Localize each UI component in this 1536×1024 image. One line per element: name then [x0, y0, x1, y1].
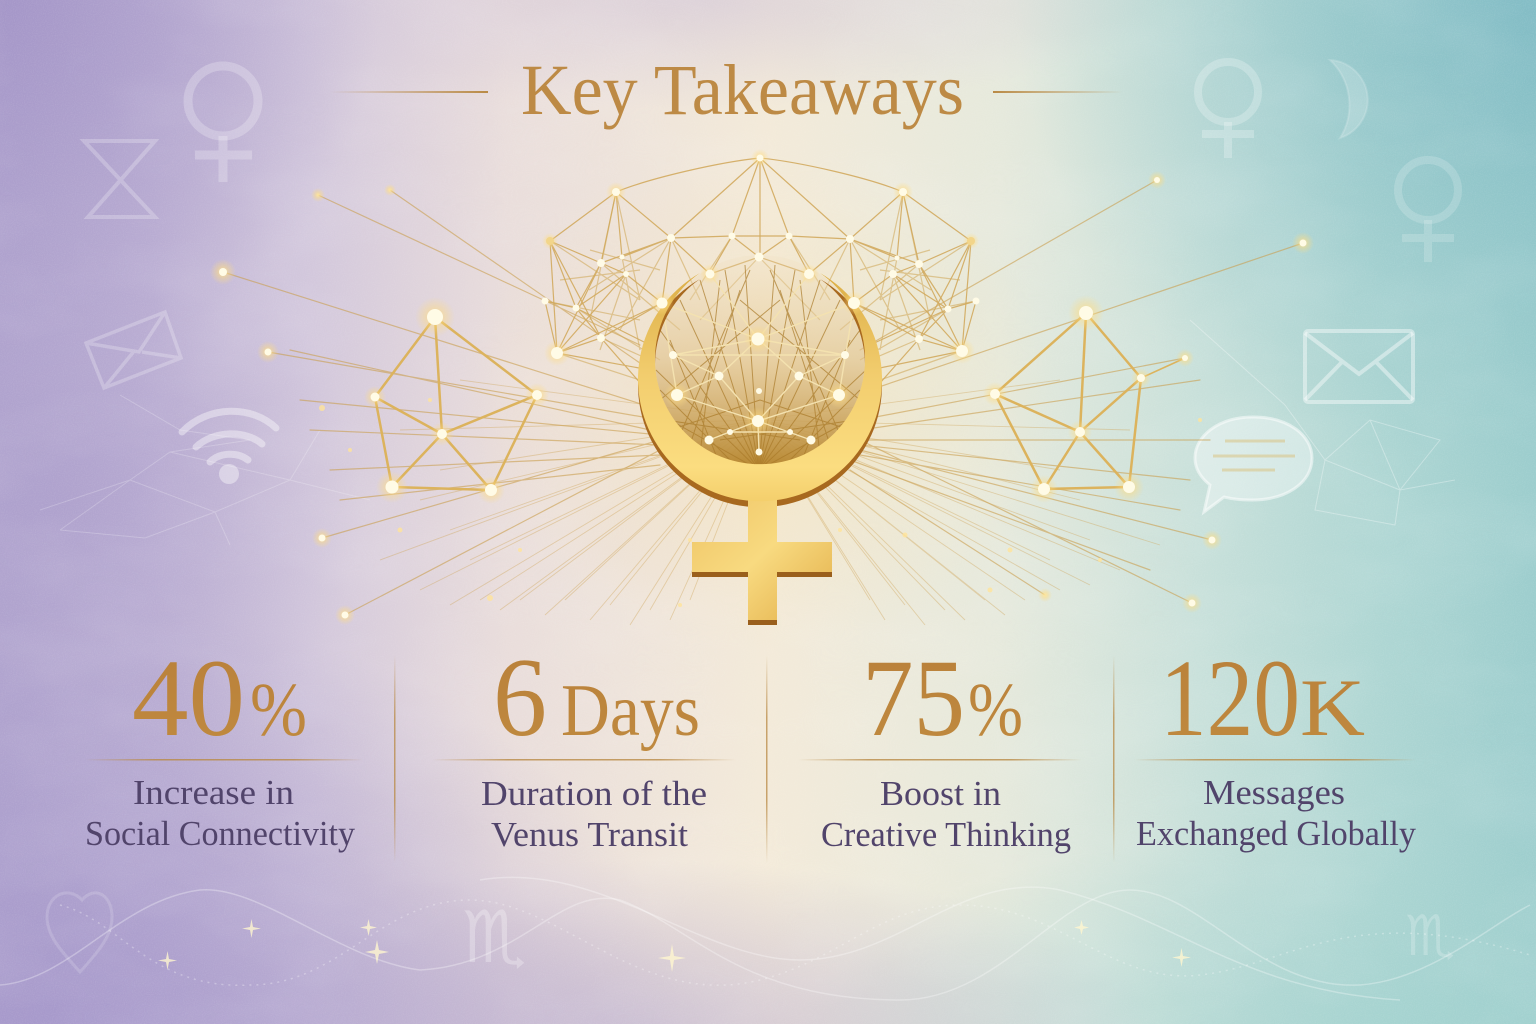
left small network [375, 317, 537, 490]
central glow [460, 150, 1060, 650]
icon: ghost venus top left [188, 66, 258, 182]
stat label: Boost in [880, 774, 1001, 813]
stat value: 6 [493, 636, 547, 760]
venus bowl [655, 255, 865, 465]
stat value: % [968, 668, 1023, 752]
top dome network [545, 158, 976, 400]
icon: ghost wifi [182, 411, 276, 484]
ghost scorpio glyph right: ♏ [1405, 904, 1455, 969]
stat: 40% [85, 637, 363, 853]
stat label: Duration of the [481, 774, 707, 813]
title right rule [993, 91, 1123, 93]
stat value: 40 [132, 637, 245, 759]
venus symbol [638, 255, 882, 625]
gold sparkles [319, 398, 1202, 607]
stem and cross [692, 490, 832, 620]
stat: 120K [1134, 637, 1416, 853]
inner network lines [656, 265, 866, 470]
divider [1113, 655, 1114, 863]
title left rule [330, 91, 488, 93]
icon: ghost envelope right [1305, 331, 1413, 402]
title text: Key Takeaways [521, 50, 964, 130]
stat value: 120 [1160, 637, 1300, 759]
stat label: Creative Thinking [821, 815, 1071, 854]
stat value: Days [561, 670, 700, 752]
stat value: 75 [862, 637, 965, 759]
divider [394, 655, 396, 863]
icon: ghost hourglass [84, 141, 155, 217]
fine burst lines under ring [380, 380, 1160, 625]
right small network [995, 313, 1185, 489]
stat: 75% [798, 637, 1082, 854]
faint constellation right [1190, 320, 1455, 525]
icon: ghost speech bubble [1195, 417, 1312, 512]
network nodes [210, 149, 1314, 625]
stat value: K [1300, 662, 1365, 753]
stat: 6 Days [432, 636, 736, 854]
ghost heart glyph bottom left [47, 893, 112, 972]
stem and cross shadow [692, 497, 832, 625]
stat label: Venus Transit [491, 815, 688, 854]
faint constellation left [40, 395, 370, 545]
stat label: Social Connectivity [85, 814, 355, 853]
icon: ghost crescent moon [1330, 60, 1368, 138]
crescent ring shadow [638, 279, 882, 507]
golden rays fan [223, 180, 1303, 615]
stat rule [85, 759, 363, 760]
crescent ring [638, 273, 882, 501]
icon: ghost envelope left [86, 312, 181, 388]
stat label: Increase in [133, 773, 294, 812]
stat value: % [250, 668, 307, 752]
icon: ghost venus right [1398, 160, 1458, 262]
stat rule [798, 759, 1082, 760]
ghost scorpio glyph centre: ♏ [462, 895, 527, 979]
stat rule [432, 759, 736, 760]
stat rule [1134, 759, 1416, 760]
bottom sparkles [158, 919, 1191, 972]
bottom flowing waves [0, 877, 1530, 1000]
divider [766, 655, 768, 863]
icon: ghost venus top right [1198, 62, 1258, 158]
stat label: Exchanged Globally [1136, 814, 1416, 853]
stat label: Messages [1203, 773, 1345, 812]
